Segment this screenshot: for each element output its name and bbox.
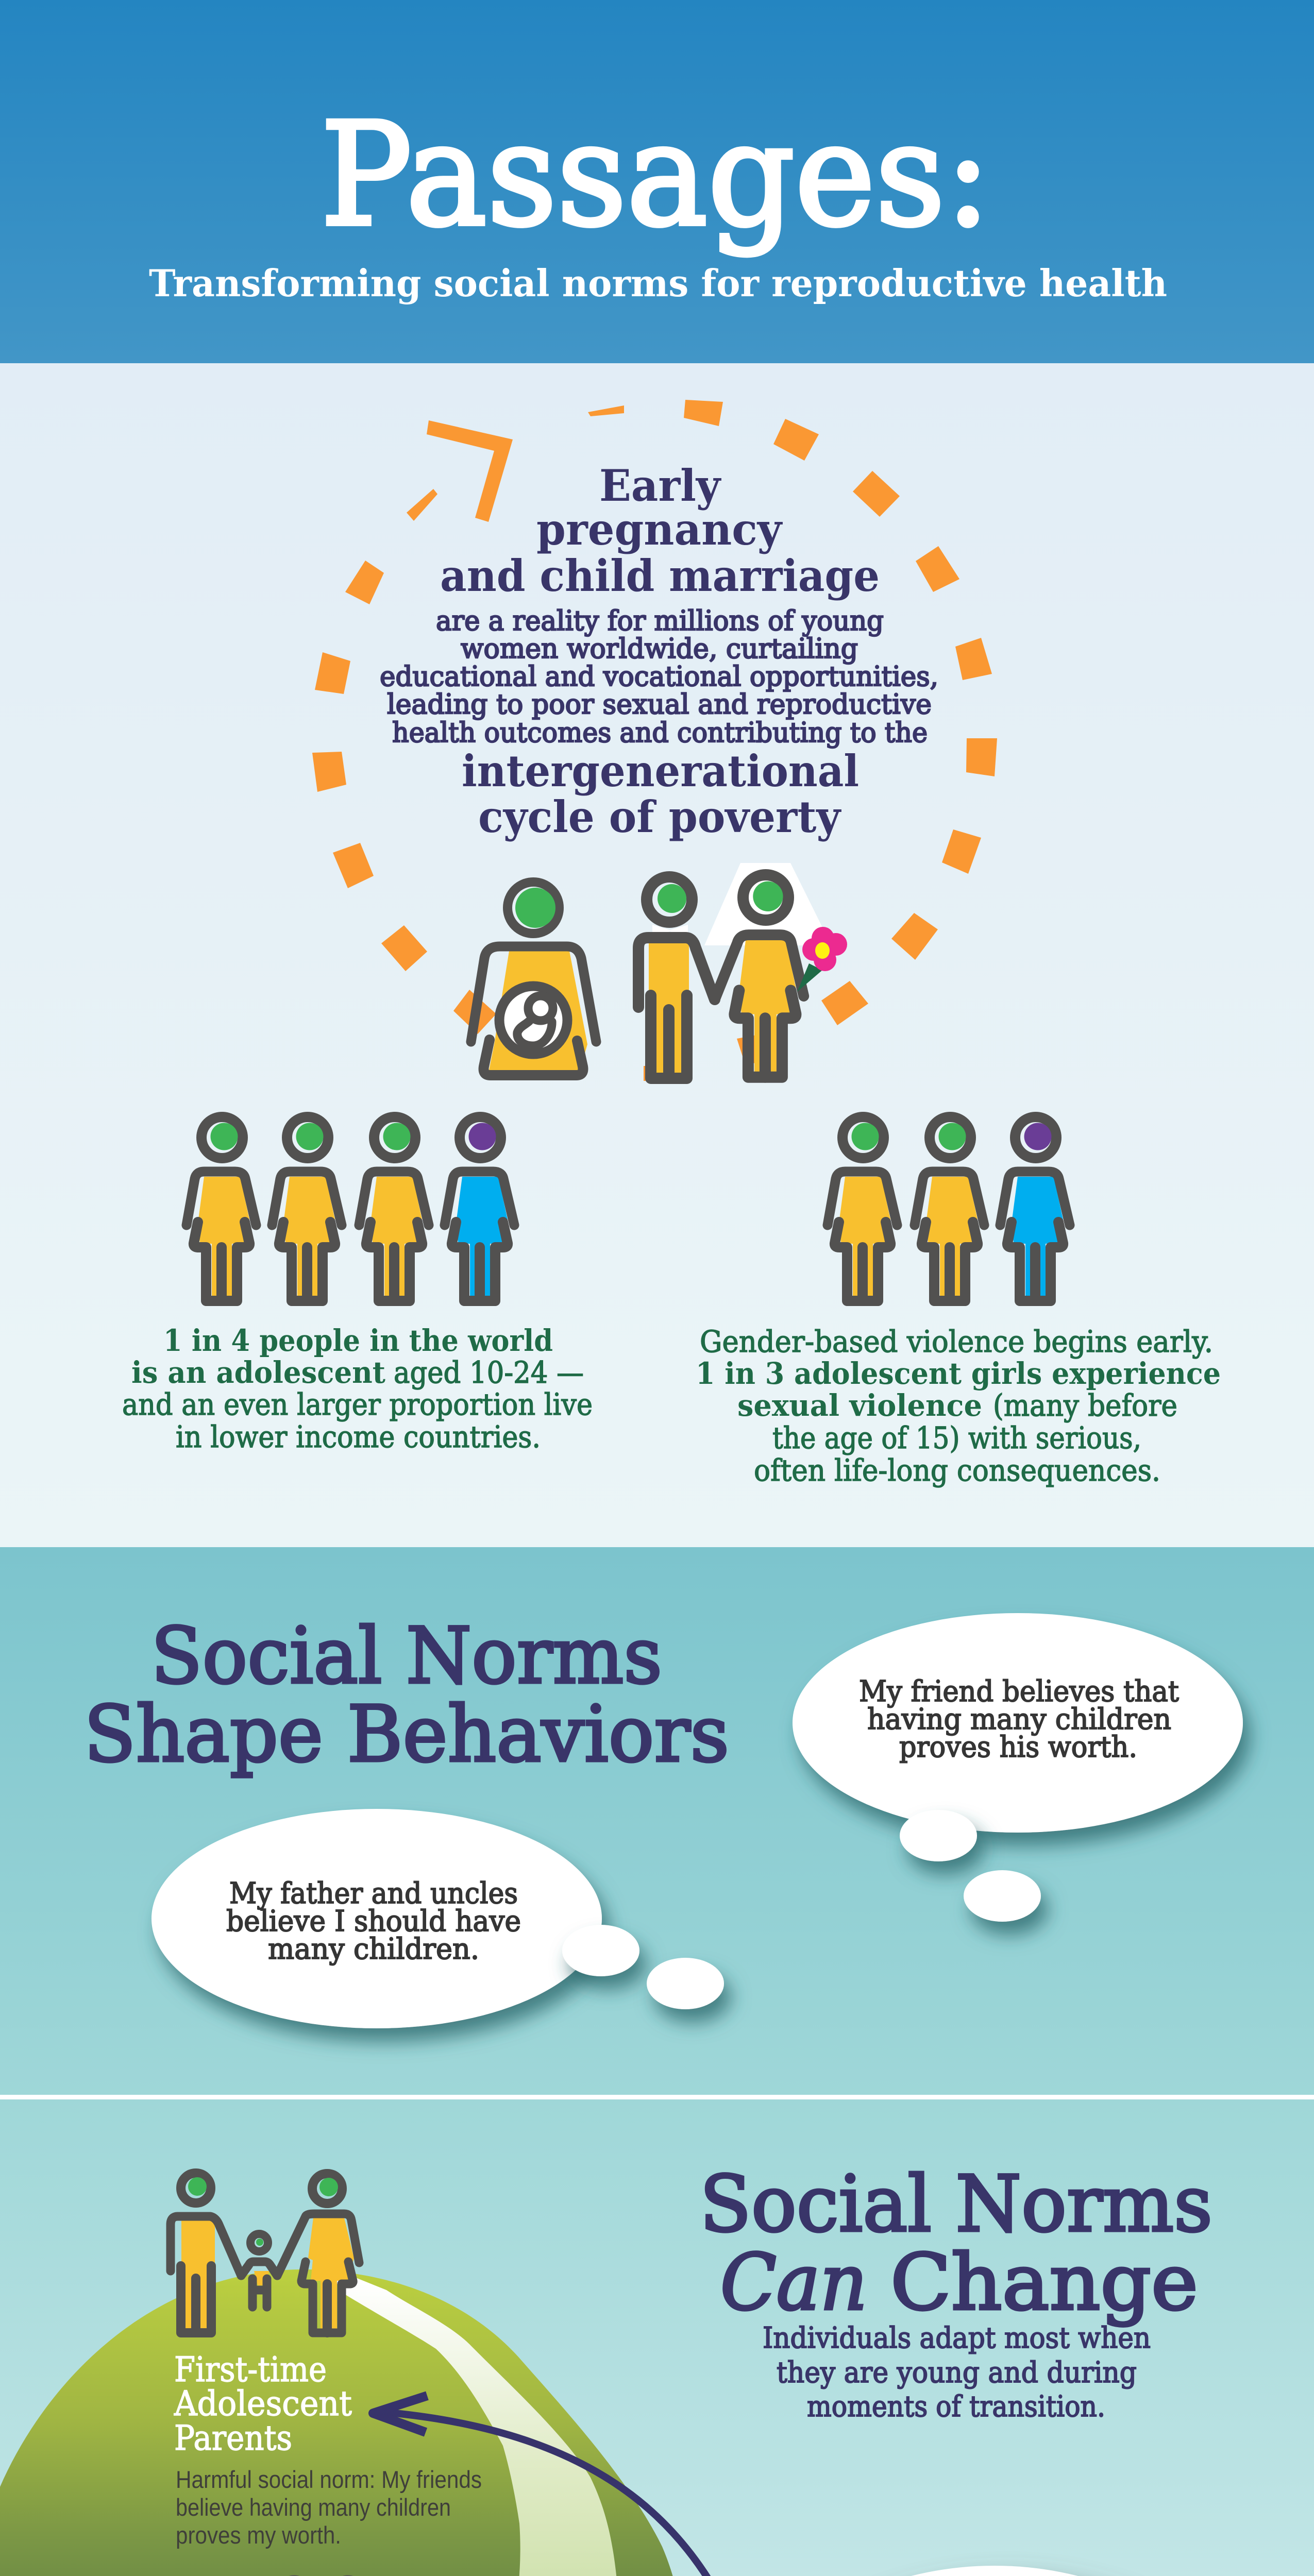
text: consequences: educational and vocational opportunities, [380, 661, 938, 692]
heading: social norms can change: Can [720, 2238, 867, 2328]
text: 1 in 4 statistic: in lower income countries. [176, 1419, 541, 1454]
title: Passages: [321, 93, 991, 258]
heading: social norms shape behaviors: Shape Behaviors [84, 1690, 729, 1780]
thought bubble: father: believe I should have [226, 1905, 521, 1938]
heading: early pregnancy: and child marriage [440, 550, 880, 601]
text: individuals adapt: they are young and during [777, 2356, 1137, 2389]
text: first-time adolescent parents: First-time [174, 2350, 327, 2389]
thought bubble: father: My father and uncles [229, 1877, 518, 1910]
orange dashed ring [312, 400, 997, 1081]
subtitle: Transforming social norms for reproductive health [149, 261, 1167, 305]
text: 1 in 3 statistic: often life-long consequences. [754, 1453, 1160, 1488]
heading: early pregnancy: pregnancy [536, 504, 783, 555]
hill: first-time parents [0, 2269, 703, 2576]
heading: early pregnancy: Early [599, 460, 721, 511]
text: first-time adolescent parents: Parents [174, 2418, 292, 2458]
text: individuals adapt: moments of transition. [807, 2390, 1105, 2424]
text: consequences: women worldwide, curtailing [461, 633, 858, 665]
thought bubble: friend [793, 1613, 1243, 1922]
father [171, 2173, 241, 2334]
panel: header [0, 0, 1314, 363]
text: 1 in 3 statistic: sexual violence [737, 1388, 982, 1423]
text: consequences [380, 605, 938, 749]
heading: intergenerational cycle of poverty: intergenerational [462, 745, 859, 796]
heading: early pregnancy [440, 460, 880, 601]
text: 1 in 4 statistic: is an adolescent [131, 1355, 385, 1390]
heading: social norms can change: Social Norms [700, 2160, 1212, 2249]
panel: social norms can change [0, 2099, 1314, 2576]
panel: social norms shape behaviors [0, 1547, 1314, 2095]
text: 1 in 4 statistic: and an even larger proportion live [122, 1387, 593, 1422]
text: first-time adolescent parents [174, 2350, 482, 2549]
veil [704, 863, 822, 945]
text: 1 in 3 statistic [696, 1324, 1221, 1488]
text: first-time adolescent parents: proves my worth. [176, 2521, 341, 2549]
heading: intergenerational cycle of poverty [462, 745, 859, 842]
panel: early pregnancy and child marriage [0, 363, 1314, 1547]
text: consequences: leading to poor sexual and reproductive [387, 689, 932, 720]
thought bubble: father [151, 1809, 724, 2028]
text: 1 in 3 statistic: 1 in 3 adolescent girls experience [696, 1356, 1221, 1391]
text: first-time adolescent parents: believe having many children [176, 2494, 451, 2521]
thought bubble: friend: proves his worth. [899, 1731, 1137, 1764]
text: first-time adolescent parents: Harmful social norm: My friends [176, 2466, 482, 2493]
mother [277, 2174, 359, 2333]
text: consequences: health outcomes and contributing to the [392, 717, 928, 749]
heading: intergenerational cycle of poverty: cycle of poverty [478, 791, 841, 842]
heading: social norms can change: Change [890, 2238, 1198, 2328]
icon: pregnant woman [471, 882, 596, 1075]
heading: social norms shape behaviors [84, 1612, 729, 1780]
divider: section rule [0, 2095, 1314, 2099]
groom [638, 877, 715, 1078]
text: individuals adapt: Individuals adapt most when [763, 2321, 1151, 2355]
people: 1 in 3 [828, 1117, 1070, 1301]
text: 1 in 4 statistic: aged 10-24 — [394, 1355, 584, 1390]
arrow: to first-time parents [373, 2396, 753, 2576]
text: consequences: are a reality for millions of young [436, 605, 884, 637]
family: first-time adolescent parents [171, 2173, 359, 2334]
text: 1 in 3 statistic: Gender-based violence begins early. [700, 1324, 1213, 1359]
icon: bride and groom [638, 863, 847, 1078]
text: 1 in 3 statistic: (many before [993, 1388, 1177, 1423]
heading: social norms can change [700, 2160, 1212, 2328]
text: 1 in 4 statistic [122, 1323, 593, 1454]
text: first-time adolescent parents: Adolescent [174, 2384, 352, 2424]
bouquet [797, 927, 847, 992]
text: 1 in 4 statistic: 1 in 4 people in the world [163, 1323, 553, 1358]
child [241, 2234, 277, 2307]
circle: passages [655, 2566, 1314, 2576]
thought bubble: friend: My friend believes that [859, 1675, 1179, 1708]
people: 1 in 4 [187, 1117, 514, 1301]
thought bubble: father: many children. [268, 1933, 479, 1966]
thought bubble: friend: having many children [867, 1703, 1171, 1736]
heading: social norms shape behaviors: Social Norms [151, 1612, 662, 1701]
text: individuals adapt [763, 2321, 1151, 2424]
bride [715, 875, 804, 1077]
text: 1 in 3 statistic: the age of 15) with serious, [772, 1420, 1141, 1455]
